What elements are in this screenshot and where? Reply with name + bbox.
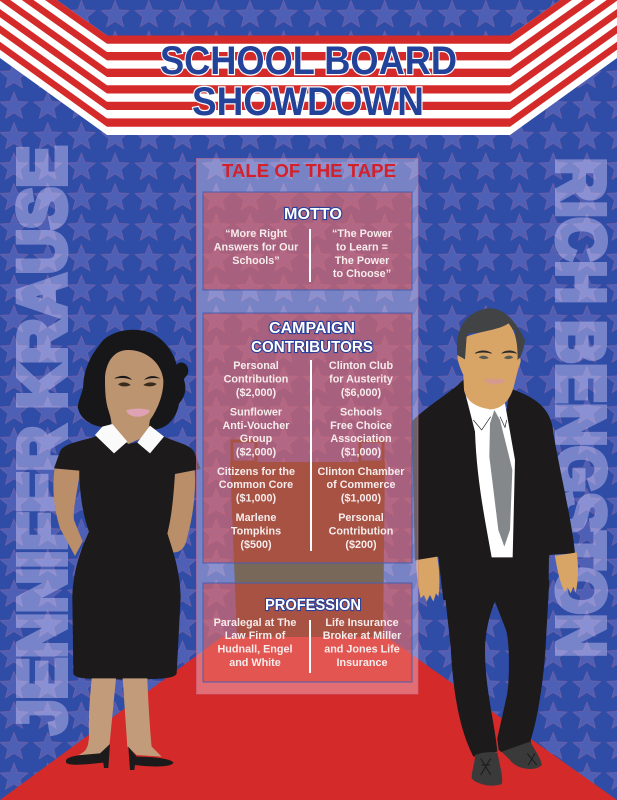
panel: campaign contributors: of Commerce — [326, 479, 396, 491]
panel: motto: The Power — [335, 255, 390, 267]
man trousers and shoes — [443, 580, 549, 786]
panel: motto: to Choose” — [333, 268, 391, 280]
lips — [126, 409, 150, 417]
woman legs and shoes — [66, 678, 173, 770]
man upper body — [412, 308, 578, 602]
panel: campaign contributors — [203, 313, 412, 563]
black dress — [54, 432, 201, 679]
panel: profession: Hudnall, Engel — [218, 644, 292, 656]
panel: campaign contributors: Tompkins — [231, 526, 281, 538]
eyebrows — [475, 351, 517, 353]
panel: profession: Life Insurance — [325, 617, 399, 629]
hair — [78, 330, 188, 429]
panel: campaign contributors: CONTRIBUTORS — [251, 339, 373, 356]
panel: campaign contributors: Personal — [338, 512, 384, 524]
panel: motto: to Learn = — [336, 242, 388, 254]
panel: campaign contributors: Clinton Club — [329, 360, 393, 372]
red carpet — [0, 637, 617, 800]
panel: campaign contributors: ($2,000) — [236, 446, 277, 458]
panel: campaign contributors: Clinton Chamber — [318, 466, 405, 478]
legs — [78, 678, 162, 757]
panel: profession: PROFESSION — [265, 597, 361, 614]
collar line — [473, 417, 507, 430]
shoes — [66, 744, 173, 770]
panel: campaign contributors: Anti-Voucher — [223, 420, 290, 432]
panel: motto: Schools” — [232, 255, 280, 267]
panel: campaign contributors: ($1,000) — [236, 492, 277, 504]
panel: profession — [203, 583, 412, 682]
panel: campaign contributors: Association — [330, 433, 392, 445]
jacket — [412, 380, 575, 600]
panel: profession: and Jones Life — [324, 644, 400, 656]
title — [160, 39, 457, 124]
stage prop behind panel — [230, 441, 385, 637]
name: Jennifer Krause: JENNIFER KRAUSE — [5, 146, 80, 734]
panel: campaign contributors: ($6,000) — [341, 387, 382, 399]
panel: profession: Broker at Miller — [323, 630, 402, 642]
panel: campaign contributors: Contribution — [224, 374, 288, 386]
panel: profession: Paralegal at The — [214, 617, 296, 629]
face and neck — [105, 350, 163, 444]
trousers — [443, 580, 549, 757]
hands — [416, 552, 578, 602]
figure: Jennifer Krause — [53, 330, 201, 770]
panel: campaign contributors: ($1,000) — [341, 492, 382, 504]
lips — [484, 379, 506, 384]
panel: motto — [203, 192, 412, 290]
panel: motto: MOTTO — [284, 206, 342, 223]
shoes — [472, 742, 542, 786]
figure: Rich Bengston — [412, 308, 578, 786]
panel: campaign contributors: ($1,000) — [341, 446, 382, 458]
panel: campaign contributors: Sunflower — [230, 406, 283, 418]
panel: campaign contributors: ($2,000) — [236, 387, 277, 399]
panel: campaign contributors: Personal — [233, 360, 279, 372]
title: SHOWDOWN — [192, 80, 424, 124]
shoe laces — [481, 753, 537, 775]
woman upper body — [53, 330, 201, 679]
face and neck — [457, 323, 521, 409]
panel: campaign contributors: CAMPAIGN — [269, 320, 355, 337]
hair — [457, 308, 525, 361]
panel: profession: and White — [229, 657, 281, 669]
arms — [53, 468, 195, 556]
panel: campaign contributors: Schools — [340, 406, 382, 418]
panel: campaign contributors: Common Core — [219, 479, 293, 491]
panel: campaign contributors: Marlene — [236, 512, 276, 524]
panel: campaign contributors: ($500) — [240, 539, 272, 551]
panel: campaign contributors: Free Choice — [330, 420, 392, 432]
title: SCHOOL BOARD — [160, 39, 457, 83]
panel: campaign contributors: for Austerity — [329, 374, 393, 386]
eyes — [118, 382, 157, 386]
eyebrows — [114, 376, 161, 380]
panel: motto: “More Right — [225, 228, 287, 240]
panel: profession: Insurance — [336, 657, 388, 669]
eyes — [479, 356, 513, 359]
panel: motto: “The Power — [332, 228, 393, 240]
tie — [489, 410, 512, 547]
panel: profession: Law Firm of — [225, 630, 286, 642]
panel: tale of the tape — [196, 158, 418, 694]
panel: campaign contributors: Contribution — [329, 526, 393, 538]
panel heading: TALE OF THE TAPE — [222, 161, 396, 181]
name: Rich Bengston: RICH BENGSTON — [543, 158, 617, 657]
panel: campaign contributors: Citizens for the — [217, 466, 295, 478]
panel: motto: Answers for Our — [214, 242, 299, 254]
panel: campaign contributors: Group — [240, 433, 273, 445]
panel: campaign contributors: ($200) — [345, 539, 377, 551]
shirt — [466, 395, 515, 557]
white collar — [95, 424, 164, 453]
stripe banner — [0, 0, 617, 135]
